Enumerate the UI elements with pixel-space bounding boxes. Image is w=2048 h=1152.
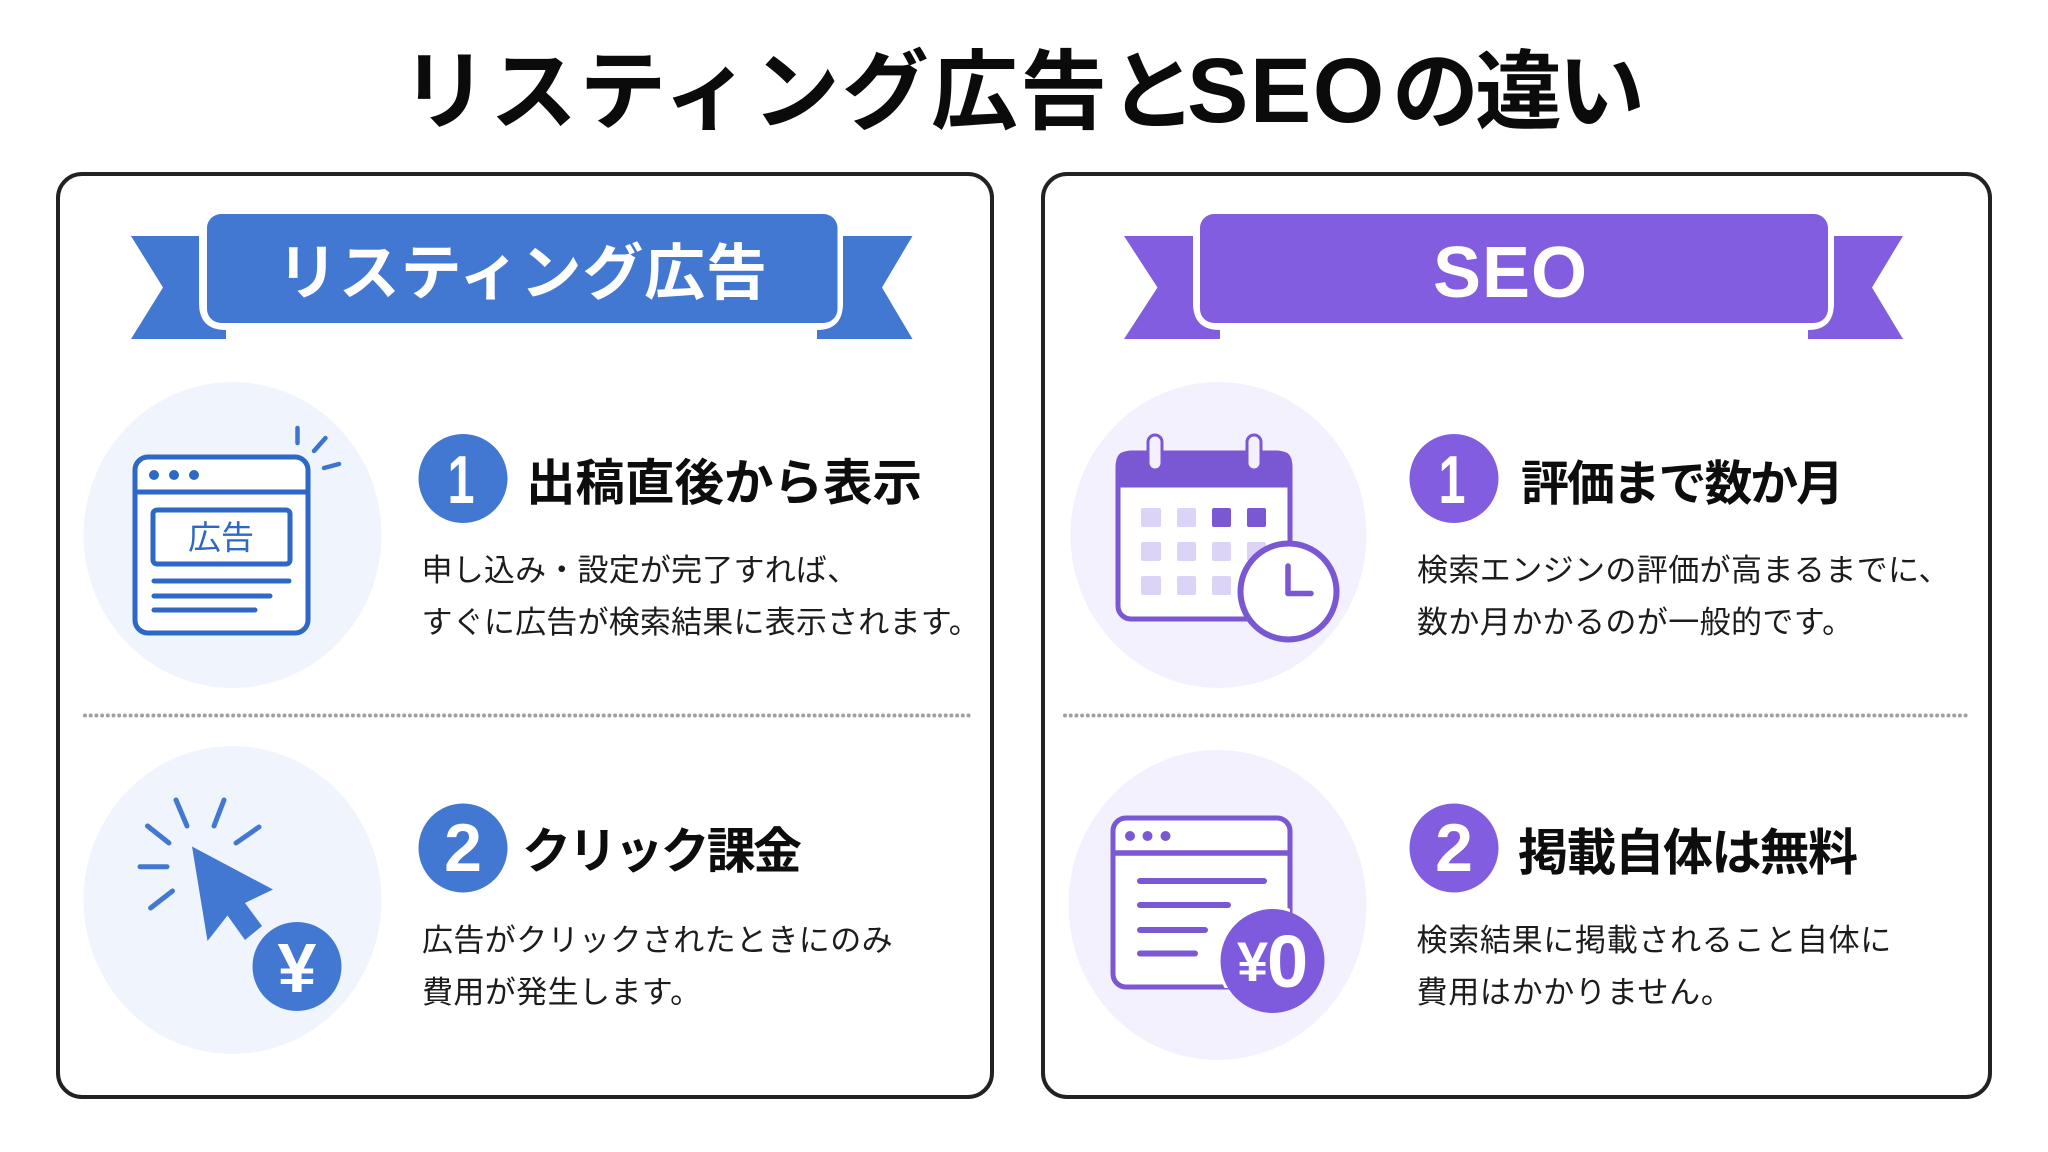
number badge 1	[1410, 434, 1498, 523]
number badge 1	[418, 434, 508, 523]
description: click billing: 費用が発生します。	[422, 975, 702, 1010]
icon: cursor click with yen: ¥	[278, 929, 317, 1007]
heading: click billing: クリック課金	[522, 825, 802, 879]
number badge 2: 2	[1435, 810, 1473, 886]
icon: search result page with zero yen	[1068, 750, 1366, 1060]
panel: SEO	[1043, 174, 1990, 1097]
description: free listing: 費用はかかりません。	[1416, 975, 1733, 1010]
description: immediate display: 申し込み・設定が完了すれば、	[422, 553, 858, 588]
item 2: free listing	[1068, 750, 1892, 1060]
heading: immediate display: 出稿直後から表示	[526, 456, 922, 511]
icon: calendar with clock	[1070, 382, 1366, 688]
ribbon heading: SEO	[1124, 214, 1903, 339]
title: リスティング広告と	[401, 44, 1199, 141]
number badge 2	[418, 804, 508, 892]
icon: search result page with zero yen: ¥	[1237, 930, 1268, 993]
item 1: immediate display	[84, 382, 980, 688]
divider	[85, 714, 973, 718]
number badge 1: 1	[448, 442, 474, 518]
heading: free listing: 掲載自体は無料	[1518, 825, 1858, 881]
item 2: click billing	[84, 746, 893, 1054]
panel: listing ads	[58, 174, 992, 1097]
icon: browser with ad	[84, 382, 382, 688]
title: の違い	[1392, 44, 1641, 141]
item 1: takes months	[1070, 382, 1950, 688]
icon: browser with ad: 広告	[188, 519, 254, 556]
ribbon heading: listing ads: リスティング広告	[277, 239, 767, 307]
heading: takes months: 評価まで数か月	[1521, 458, 1844, 511]
icon: cursor click with yen	[84, 746, 382, 1054]
title: SEO	[1187, 40, 1386, 142]
description: free listing: 検索結果に掲載されること自体に	[1416, 923, 1892, 958]
ribbon heading: SEO: SEO	[1433, 233, 1587, 313]
description: takes months: 数か月かかるのが一般的です。	[1417, 605, 1854, 640]
description: click billing: 広告がクリックされたときにのみ	[422, 923, 893, 958]
icon: search result page with zero yen: 0	[1267, 920, 1308, 1003]
number badge 2	[1410, 804, 1498, 892]
number badge 2: 2	[444, 810, 482, 886]
description: takes months: 検索エンジンの評価が高まるまでに、	[1417, 553, 1950, 588]
number badge 1: 1	[1438, 442, 1466, 518]
description: immediate display: すぐに広告が検索結果に表示されます。	[422, 605, 980, 640]
divider	[1065, 714, 1970, 718]
ribbon heading: listing ads	[131, 214, 912, 339]
